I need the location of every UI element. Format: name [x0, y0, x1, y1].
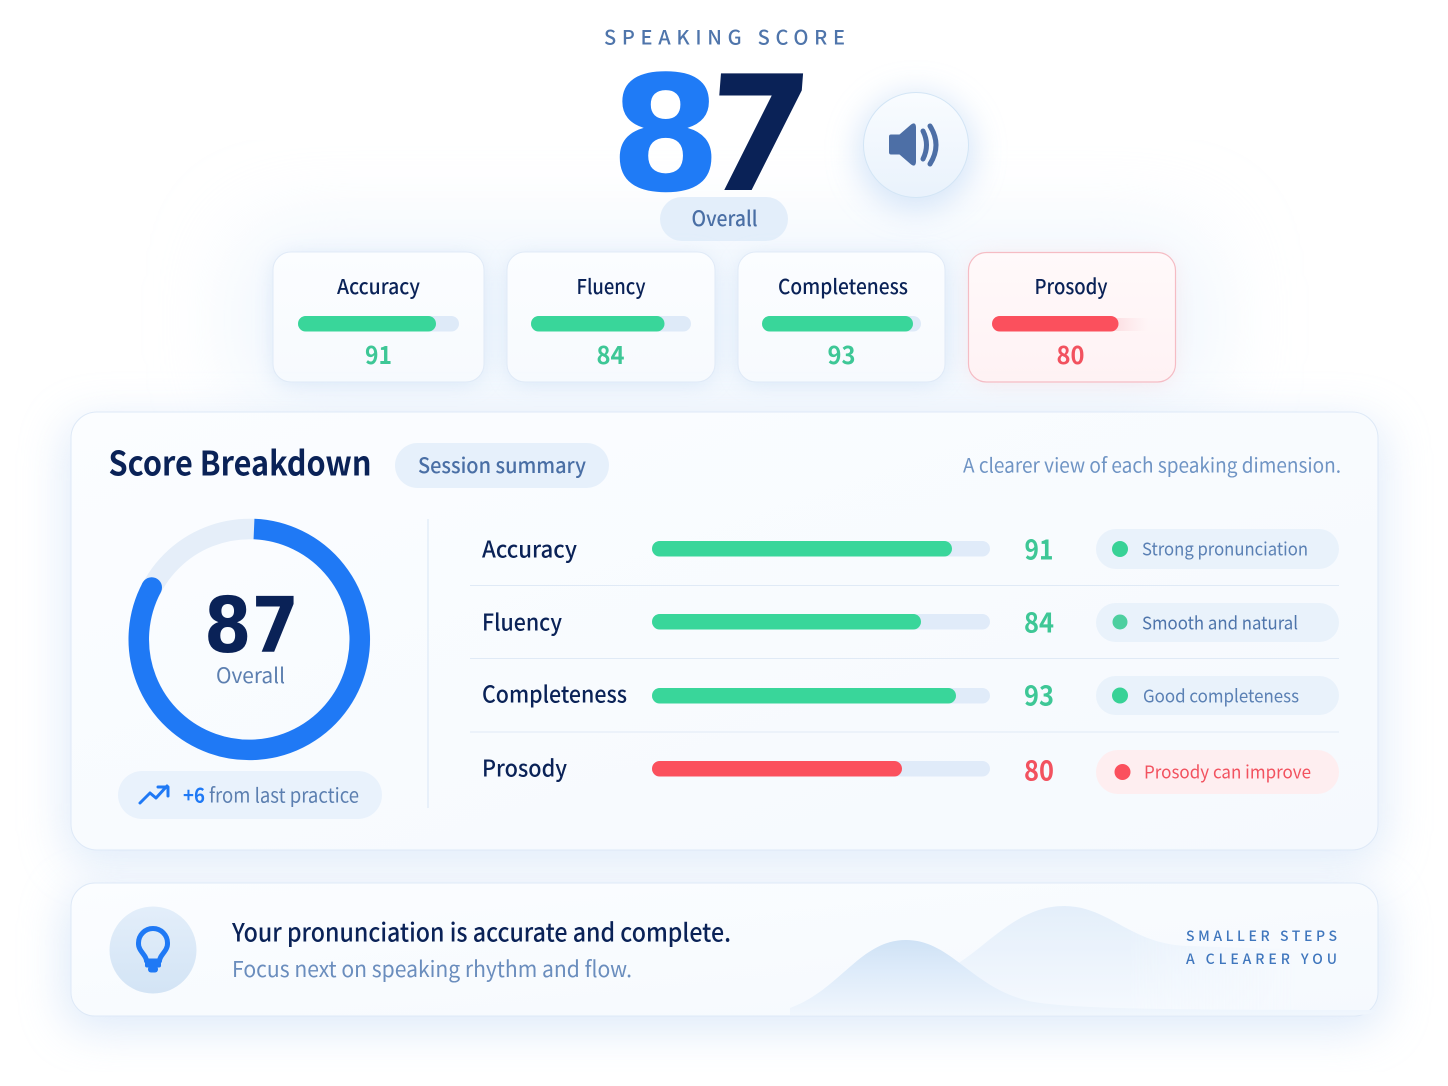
card: completeness: Completeness — [778, 270, 908, 300]
card: completeness — [738, 252, 945, 384]
tagline: SMALLER STEPS — [1186, 926, 1337, 946]
row: accuracy: 91 — [1024, 528, 1054, 568]
trend pill: +6 from last practice — [183, 780, 359, 808]
row: fluency: Fluency — [482, 604, 562, 638]
panel: summary cards — [273, 252, 1176, 384]
overall pill — [660, 197, 788, 241]
tip body: Focus next on speaking rhythm and flow. — [232, 952, 632, 984]
icon: light bulb — [110, 906, 196, 994]
row: fluency — [482, 602, 1339, 642]
donut chart: Overall — [216, 660, 285, 690]
big score number: 8 — [610, 41, 721, 228]
wave illustration — [790, 906, 1376, 1015]
row: accuracy: Accuracy — [482, 530, 577, 564]
card: fluency: 84 — [596, 336, 625, 372]
card: completeness: 93 — [828, 336, 856, 372]
row: accuracy — [482, 528, 1339, 569]
row: prosody: 80 — [1024, 750, 1054, 790]
card: prosody: Prosody — [1034, 270, 1108, 300]
heading: Score Breakdown — [108, 436, 372, 486]
row: prosody: Prosody can improve — [1144, 758, 1311, 784]
session summary pill — [395, 443, 609, 488]
subtitle: A clearer view of each speaking dimension. — [963, 450, 1341, 478]
donut chart — [139, 529, 360, 750]
card: accuracy — [273, 252, 484, 384]
trend pill — [118, 771, 382, 819]
row: completeness: 93 — [1024, 674, 1054, 714]
card: prosody: 80 — [1056, 336, 1084, 372]
donut chart: 87 — [204, 582, 299, 671]
row: accuracy: Strong pronunciation — [1142, 536, 1308, 562]
row: completeness: Good completeness — [1143, 682, 1299, 708]
card: fluency: Fluency — [576, 270, 646, 300]
big score number: 7 — [699, 41, 817, 228]
tip heading: Your pronunciation is accurate and complete. — [231, 914, 731, 950]
row: prosody: Prosody — [482, 750, 567, 784]
card: accuracy: 91 — [365, 336, 392, 372]
row: completeness — [482, 674, 1339, 715]
row: fluency: Smooth and natural — [1142, 610, 1298, 636]
card: accuracy: Accuracy — [337, 270, 420, 300]
eyebrow label: SPEAKING SCORE — [604, 22, 845, 50]
big score number — [610, 41, 817, 228]
overall pill: Overall — [692, 203, 758, 233]
row: prosody — [482, 750, 1339, 794]
tagline — [1186, 926, 1337, 969]
card: prosody — [968, 252, 1176, 384]
row: fluency: 84 — [1024, 602, 1054, 642]
row: completeness: Completeness — [482, 676, 627, 710]
panel: tip — [64, 883, 1385, 1030]
card: fluency — [507, 252, 715, 384]
session summary pill: Session summary — [418, 450, 587, 480]
header: speaking score — [604, 22, 974, 241]
icon: speaker button — [858, 92, 974, 210]
panel: score breakdown — [64, 412, 1385, 864]
tagline: A CLEARER YOU — [1186, 949, 1337, 969]
